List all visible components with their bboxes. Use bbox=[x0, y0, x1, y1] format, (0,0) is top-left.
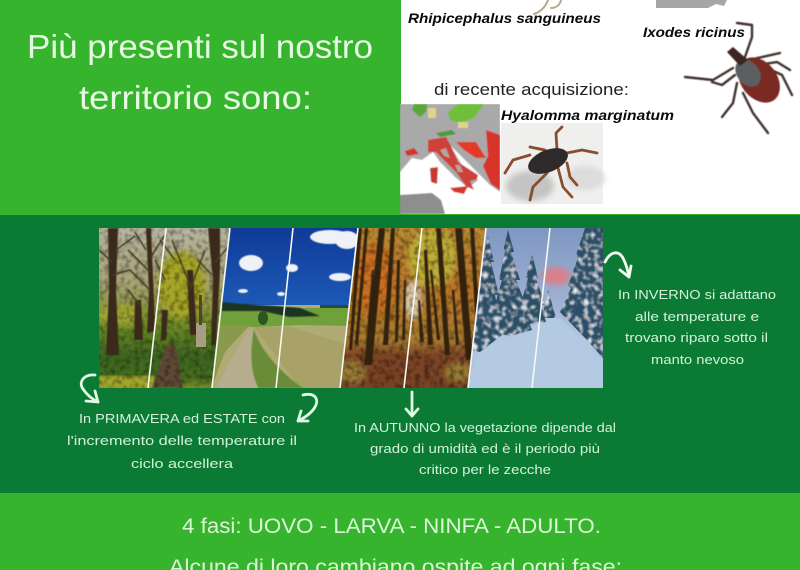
map fragment at top bbox=[656, 0, 727, 8]
panel: seasons band bbox=[0, 215, 800, 493]
text: spring and summer: In PRIMAVERA ed ESTATE con bbox=[79, 411, 285, 426]
text: winter: In INVERNO si adattano bbox=[618, 287, 776, 302]
arrow: winter bbox=[605, 253, 631, 277]
arrow: summer bbox=[298, 394, 317, 421]
text: winter bbox=[618, 287, 776, 367]
title: Più presenti sul nostro bbox=[27, 28, 373, 65]
panel: title background bbox=[0, 0, 400, 215]
species name: Rhipicephalus sanguineus: Rhipicephalus sanguineus bbox=[408, 10, 601, 26]
photo: spring forest bbox=[98, 228, 234, 388]
text: winter: manto nevoso bbox=[651, 352, 744, 367]
panel: tick species bbox=[400, 0, 800, 214]
title: territorio sono: bbox=[79, 79, 312, 116]
panel: life cycle bbox=[0, 493, 800, 570]
arrow: spring left bbox=[81, 375, 98, 402]
icon: Ixodes ricinus tick bbox=[685, 23, 792, 133]
text: autumn: In AUTUNNO la vegetazione dipende dal bbox=[354, 420, 616, 435]
icon: Rhipicephalus tick legs fragment bbox=[534, 0, 561, 14]
text: life cycle phases: 4 fasi: UOVO - LARVA - NINFA - ADULTO. bbox=[182, 515, 601, 538]
subheading: recent acquisition: di recente acquisizione: bbox=[434, 80, 629, 99]
photo strip: four seasons bbox=[98, 228, 603, 388]
species name: Ixodes ricinus: Ixodes ricinus bbox=[643, 24, 745, 40]
photo: summer field bbox=[212, 228, 359, 388]
text: spring and summer bbox=[67, 411, 297, 471]
white diagonal dividers bbox=[148, 228, 550, 388]
text: spring and summer: ciclo accellera bbox=[131, 456, 234, 471]
icon: Hyalomma marginatum tick photo bbox=[501, 123, 605, 204]
photo: autumn forest bbox=[338, 228, 486, 388]
map: Italy distribution bbox=[400, 104, 500, 214]
text: winter: trovano riparo sotto il bbox=[625, 330, 768, 345]
photo: winter road bbox=[466, 228, 603, 388]
text: autumn bbox=[354, 420, 616, 477]
text: life cycle phases bbox=[169, 515, 622, 570]
arrow: autumn bbox=[406, 392, 418, 416]
text: autumn: grado di umidità ed è il periodo più bbox=[370, 441, 600, 456]
species name: Hyalomma marginatum: Hyalomma marginatum bbox=[501, 107, 674, 123]
text: winter: alle temperature e bbox=[635, 309, 759, 324]
title bbox=[27, 28, 373, 116]
text: spring and summer: l'incremento delle temperature il bbox=[67, 433, 297, 448]
text: autumn: critico per le zecche bbox=[419, 462, 551, 477]
